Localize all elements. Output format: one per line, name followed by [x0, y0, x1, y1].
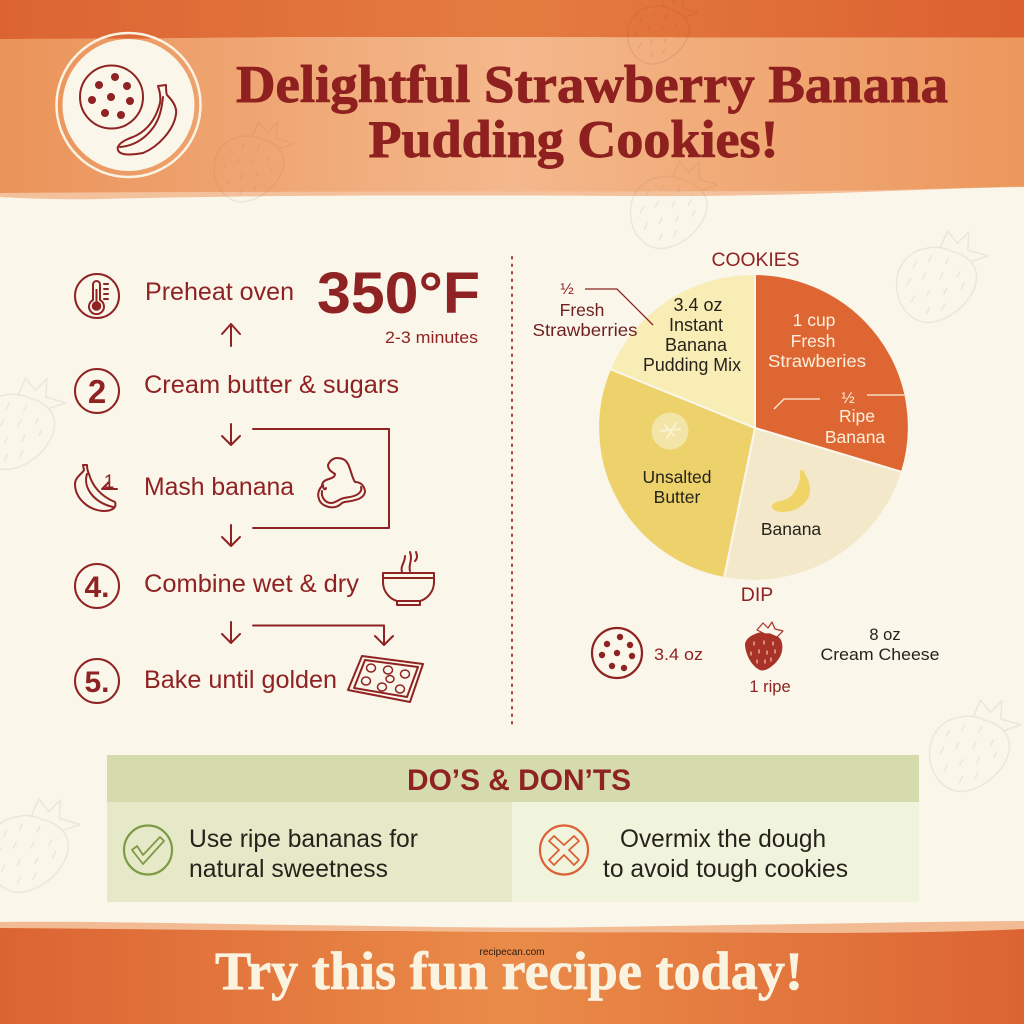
title: Pudding Cookies!: [368, 111, 778, 169]
step text: Combine wet & dry: [144, 570, 359, 598]
label: ripe banana: [774, 390, 904, 447]
pie chart: [598, 274, 909, 581]
panel heading: DO’S & DON’TS: [407, 764, 631, 797]
amount: 1 ripe: [749, 678, 791, 696]
heading: dip: DIP: [741, 584, 773, 606]
label: pudding mix: Banana: [665, 335, 728, 355]
icon: check: [124, 826, 172, 874]
external label: fresh strawberries: ½: [560, 281, 574, 298]
logo badge: cookie and banana: [56, 33, 200, 177]
step 2: cream butter: [75, 369, 399, 413]
label: butter: [642, 467, 712, 507]
external label: fresh strawberries: Fresh: [560, 300, 604, 320]
label: pudding mix: Pudding Mix: [643, 355, 741, 375]
step text: Preheat oven: [145, 278, 294, 306]
panel header: [107, 755, 919, 802]
arrow up: [222, 324, 240, 346]
footer edge: [0, 921, 1024, 945]
external label: fresh strawberries: Strawberries: [532, 320, 638, 340]
do cell: natural sweetness: [189, 855, 388, 883]
icon: banana: 1: [104, 472, 114, 493]
divider: [511, 257, 513, 724]
dip item: strawberry: [745, 622, 791, 696]
label: strawberries: [768, 310, 866, 371]
arrow down: [222, 424, 240, 445]
don't cell: to avoid tough cookies: [603, 855, 848, 883]
slice: fresh strawberries: [755, 274, 909, 472]
number badge: 5.: [84, 666, 110, 699]
label: butter: Butter: [654, 487, 701, 507]
do text: Use ripe bananas for: [189, 825, 418, 853]
connector arrow: [253, 626, 393, 645]
icon: cross: [540, 826, 588, 874]
temperature: 350°F: [317, 261, 480, 326]
label: strawberries: Fresh: [791, 331, 835, 351]
header light band: [0, 37, 1024, 199]
connector: [253, 429, 389, 528]
slice: pudding mix: [610, 274, 755, 428]
title: Delightful Strawberry Banana: [236, 56, 948, 114]
label: ripe banana: Ripe: [839, 406, 875, 426]
amount: 3.4 oz: [654, 646, 703, 664]
dip item: cookie: [592, 628, 703, 678]
dip item: cream cheese: 8 oz: [869, 626, 901, 644]
arrow down: [222, 525, 240, 546]
number badge: [75, 369, 119, 413]
pie heading: cookies: COOKIES: [712, 249, 800, 271]
step 3: mash banana: [75, 458, 365, 511]
number badge: [75, 659, 119, 703]
icon: cookie: [592, 628, 642, 678]
icon: thermometer: [75, 274, 119, 318]
do cell: [107, 802, 512, 902]
title: [236, 56, 948, 169]
icon: banana slice: [652, 412, 688, 450]
watermark credit: recipecan.com: [479, 947, 545, 958]
dip item: cream cheese: Cream Cheese: [820, 646, 940, 664]
label: pudding mix: 3.4 oz: [673, 295, 723, 315]
step 4: combine: [75, 552, 434, 608]
slice: unsalted butter: [598, 369, 755, 578]
number badge: [75, 564, 119, 608]
header top band: [0, 0, 1024, 42]
step text: Mash banana: [144, 473, 294, 501]
header main band: [0, 37, 1024, 193]
label: pudding mix: [643, 295, 741, 375]
icon: strawberry: [745, 622, 783, 670]
step 1: preheat oven: [75, 261, 480, 347]
slice: banana: [724, 428, 902, 581]
number badge: 4.: [84, 571, 110, 604]
label: strawberries: 1 cup: [793, 310, 835, 330]
arrow down: [222, 622, 240, 643]
label: ripe banana: Banana: [825, 427, 885, 447]
external label: fresh strawberries: [532, 281, 653, 340]
icon: banana: [772, 470, 810, 512]
panel: do's and don'ts: [107, 755, 919, 902]
step 5: bake: [75, 656, 423, 703]
step text: Bake until golden: [144, 666, 337, 694]
label: butter: Unsalted: [642, 467, 712, 487]
icon: baking tray: [348, 656, 423, 702]
footer call to action: Try this fun recipe today!: [215, 941, 803, 1001]
number badge: 2: [88, 373, 106, 410]
don't cell: [512, 802, 919, 902]
don't text: Overmix the dough: [620, 825, 826, 853]
label: ripe banana: ½: [841, 390, 855, 407]
dip item: cream cheese: [820, 626, 940, 664]
icon: mashed banana: [318, 458, 365, 507]
icon: steaming bowl: [383, 552, 434, 605]
footer band: [0, 928, 1024, 1024]
label: pudding mix: Instant: [669, 315, 723, 335]
step text: Cream butter & sugars: [144, 371, 399, 399]
label: strawberries: Strawberies: [768, 351, 866, 371]
label: banana: Banana: [761, 519, 821, 539]
duration: 2-3 minutes: [385, 328, 478, 347]
icon: banana: [75, 465, 117, 511]
